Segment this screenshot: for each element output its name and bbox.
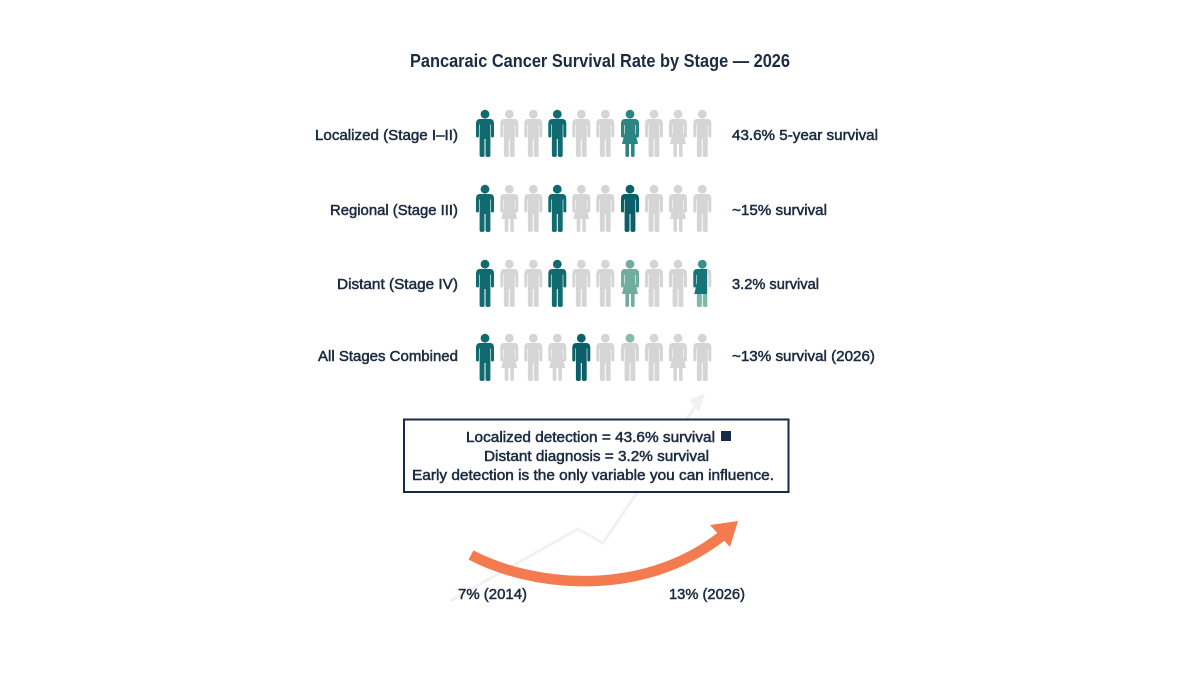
icons: localized pictogram: [476, 110, 711, 157]
value: all stages: ~13% survival (2026): [732, 349, 875, 365]
label: distant: Distant (Stage IV): [337, 277, 458, 293]
background trend arrow: [450, 393, 705, 601]
icons: all stages pictogram: [476, 334, 711, 381]
row: localized: [315, 110, 878, 157]
value: distant: 3.2% survival: [732, 277, 819, 293]
icons: regional pictogram: [476, 185, 711, 232]
value: localized: 43.6% 5-year survival: [732, 128, 878, 144]
label: regional: Regional (Stage III): [330, 203, 458, 219]
title: Pancaraic Cancer Survival Rate by Stage — 2026: [410, 51, 790, 71]
icon: square bullet: [721, 431, 731, 441]
callout line 1: Localized detection = 43.6% survival: [466, 430, 715, 446]
row: regional: [330, 185, 827, 232]
callout line 3: Early detection is the only variable you can influence.: [412, 468, 774, 484]
value: regional: ~15% survival: [732, 203, 827, 219]
callout line 2: Distant diagnosis = 3.2% survival: [484, 449, 709, 465]
label: 2026 value: 13% (2026): [669, 587, 745, 603]
orange trend arrow: [471, 521, 738, 581]
label: all stages: All Stages Combined: [318, 349, 458, 365]
label: 2014 value: 7% (2014): [458, 587, 527, 603]
icons: distant pictogram: [476, 260, 711, 307]
label: localized: Localized (Stage I–II): [315, 128, 458, 144]
row: all stages: [318, 334, 875, 381]
callout box: [404, 420, 788, 492]
row: distant: [337, 260, 819, 307]
